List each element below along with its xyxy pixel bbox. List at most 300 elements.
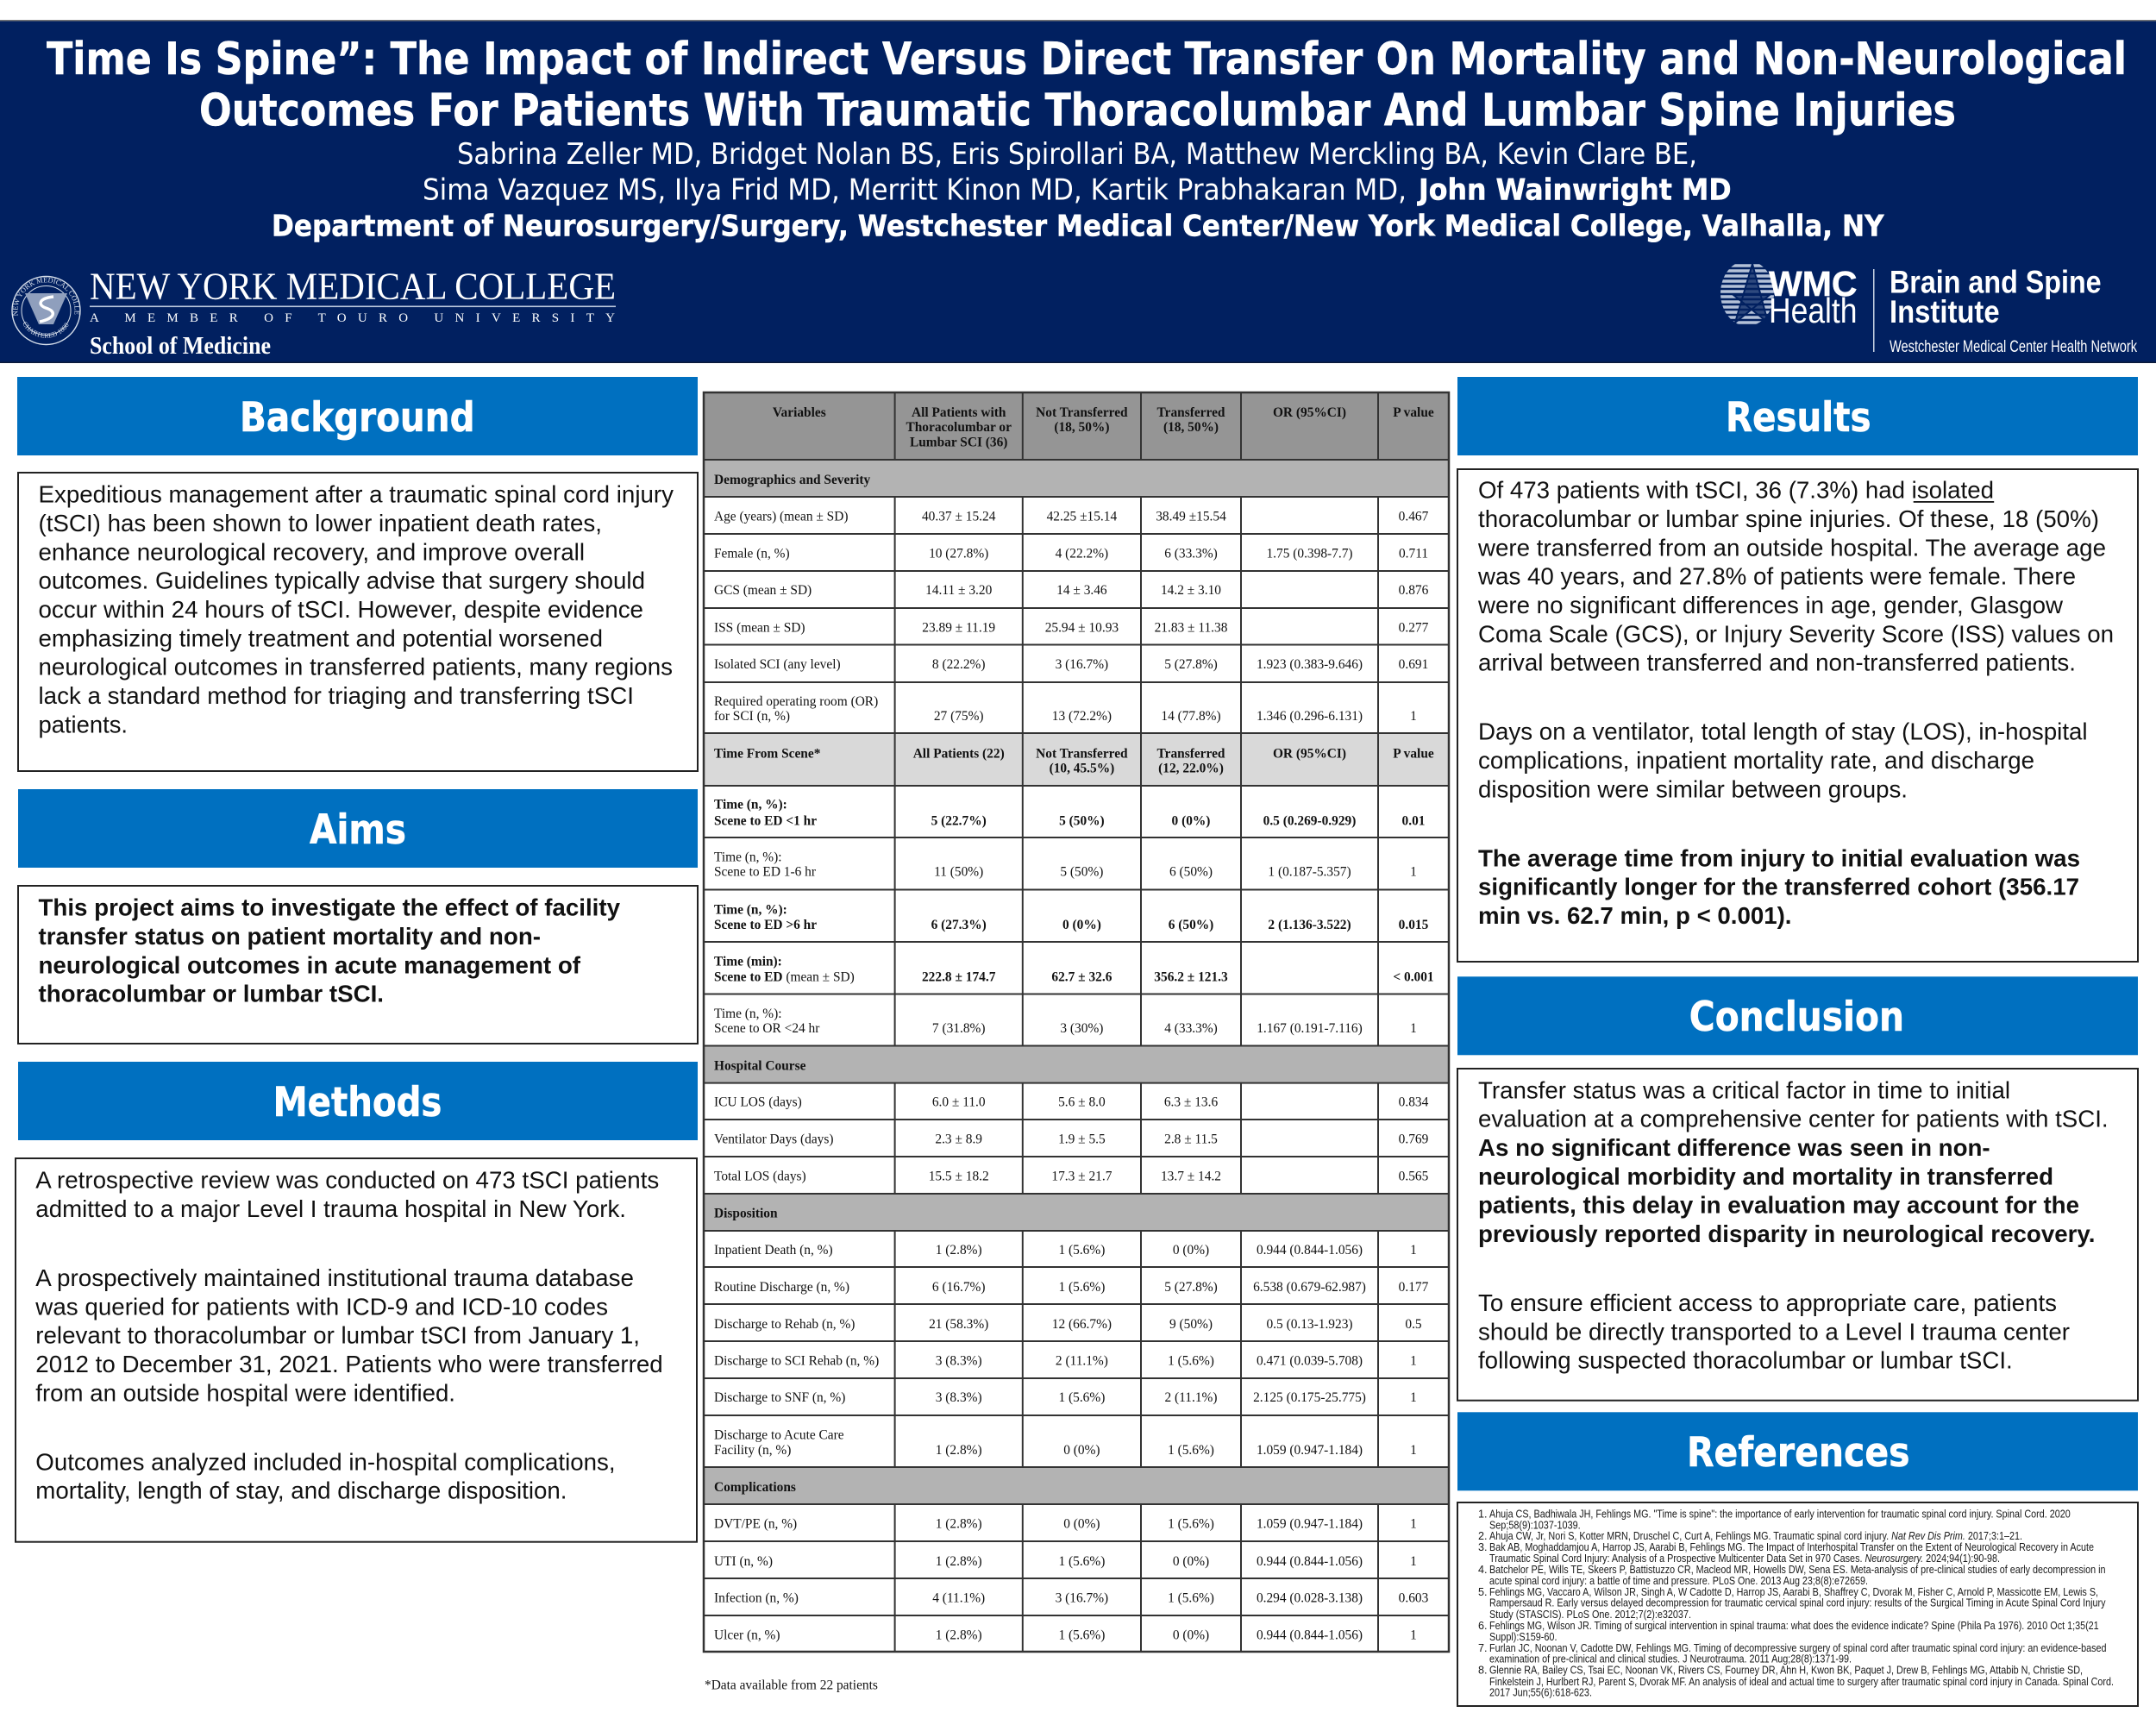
row: total LOS: 15.5 ± 18.2 [929,1169,989,1183]
text block: references [1457,1502,2138,1706]
row: required operating room: 14 (77.8%) [1161,709,1221,724]
text block: references: 2. [1478,1530,1488,1542]
text block: references: acute spinal cord injury: a battle of time and pressure. PLoS One. 2013 Aug 23;8(8):e72659. [1489,1575,1868,1587]
row: age: 40.37 ± 15.24 [922,510,996,524]
row: ICU LOS: 6.0 ± 11.0 [932,1095,986,1110]
row: scene to OR: 3 (30%) [1060,1021,1103,1036]
heading: results: Results [1726,394,1871,442]
text block: results: Of 473 patients with tSCI, 36 (7.3%) had isolated [1478,477,1994,504]
table header row: Not Transferred [1036,405,1128,420]
text block: conclusion: patients, this delay in evaluation may account for the [1478,1192,2079,1219]
row: GCS: 14.2 ± 3.10 [1161,583,1221,598]
table fills [704,392,1449,1504]
text block: references: 8. [1478,1665,1488,1677]
row: ulcer: 0 (0%) [1173,1628,1209,1642]
row: scene to OR [714,1007,1417,1036]
row: scene to ED under 1 hr: Scene to ED <1 hr [714,813,817,828]
row: ulcer: Ulcer (n, %) [714,1628,780,1642]
text block: methods: Outcomes analyzed included in-hospital complications, [35,1448,616,1475]
section: hospital course: Hospital Course [714,1058,806,1073]
row: discharge to acute care: Discharge to Acute Care [714,1427,844,1442]
heading: references [1457,1412,2138,1490]
row: scene to OR: Scene to OR <24 hr [714,1021,819,1036]
text block: background: occur within 24 hours of tSCI. However, despite evidence [38,596,643,623]
text block: conclusion: As no significant difference was seen in non- [1478,1134,1990,1161]
panel: aims [18,789,698,1044]
row: ICU LOS: 0.834 [1399,1095,1429,1110]
row: total LOS: 13.7 ± 14.2 [1161,1169,1221,1183]
row: scene to ED over 6 hr: 0 (0%) [1062,918,1101,932]
row: UTI: 1 [1410,1554,1417,1569]
row: ISS [714,621,1429,635]
text block: conclusion: evaluation at a comprehensive center for patients with tSCI. [1478,1106,2109,1132]
text block: methods: relevant to thoracolumbar or lumbar tSCI from January 1, [35,1322,640,1349]
table header row: OR (95%CI) [1273,405,1346,420]
text block: background: (tSCI) has been shown to lower inpatient death rates, [38,510,602,536]
text block: background: Expeditious management after a traumatic spinal cord injury [38,481,674,508]
row: required operating room: 13 (72.2%) [1052,709,1112,724]
text block: aims: This project aims to investigate the effect of facility [38,894,621,921]
text block: results: were no significant differences in age, gender, Glasgow [1477,592,2063,618]
row: GCS [714,583,1429,598]
logo: New York Medical College: NEW YORK MEDICAL COLLEGE [90,266,616,308]
section: time from scene: (12, 22.0%) [1158,762,1224,776]
text block: references: 6. [1478,1620,1488,1632]
row: scene to ED minutes: < 0.001 [1393,969,1434,985]
text block: references: Suppl):S159-60. [1489,1631,1557,1643]
logo: WMC Health Brain and Spine Institute [1716,264,2137,356]
row: isolated SCI: 8 (22.2%) [932,657,985,672]
text block: methods: A prospectively maintained institutional trauma database [35,1264,634,1291]
row: discharge to SCI rehab: 1 (5.6%) [1168,1354,1214,1369]
row: age: 42.25 ±15.14 [1047,510,1117,524]
row: ISS: 23.89 ± 11.19 [922,621,995,635]
row: scene to ED under 1 hr: 5 (22.7%) [931,813,987,828]
row: inpatient death: 0 (0%) [1173,1243,1209,1258]
row: ulcer: 1 [1410,1628,1417,1642]
row: discharge to rehab: Discharge to Rehab (n, %) [714,1317,855,1332]
icon: college seal: CHARTERED 1860 [22,322,69,338]
row: ICU LOS: 5.6 ± 8.0 [1058,1095,1106,1110]
row: scene to ED 1-6 hr: 6 (50%) [1169,865,1213,880]
row: ulcer: 0.944 (0.844-1.056) [1257,1628,1363,1642]
row: routine discharge: 0.177 [1399,1280,1429,1295]
row: scene to ED under 1 hr: 0.01 [1402,813,1425,828]
row: scene to ED 1-6 hr: 5 (50%) [1060,865,1103,880]
row: scene to ED over 6 hr: Time (n, %): [714,902,787,917]
row: age: 38.49 ±15.54 [1156,510,1226,524]
row: ventilator days [714,1132,1429,1147]
row: DVT/PE: 1 (2.8%) [936,1516,982,1531]
row: age: Age (years) (mean ± SD) [714,510,848,524]
panel: methods [16,1062,698,1542]
text block: references: 4. [1478,1564,1488,1576]
row: required operating room [714,694,1417,724]
row: isolated SCI: 5 (27.8%) [1164,657,1218,672]
row: discharge to acute care: 0 (0%) [1063,1443,1100,1458]
row: GCS: 14.11 ± 3.20 [925,583,993,598]
heading: conclusion: Conclusion [1689,994,1904,1041]
row: infection: 0.294 (0.028-3.138) [1257,1591,1363,1606]
row: UTI [714,1554,1417,1569]
row: female: 6 (33.3%) [1164,547,1218,561]
row: scene to OR: 1 [1410,1021,1417,1036]
section: time from scene: All Patients (22) [913,746,1005,761]
section: disposition: Disposition [714,1207,778,1221]
logo: WMC Health Brain and Spine Institute: Brain and Spine [1890,264,2102,299]
row: required operating room: 1.346 (0.296-6.131) [1257,709,1363,724]
row: UTI: UTI (n, %) [714,1554,773,1569]
row: UTI: 0 (0%) [1173,1554,1209,1569]
row: scene to ED over 6 hr: 6 (27.3%) [931,918,987,932]
text block: results: significantly longer for the transferred cohort (356.17 [1478,874,2079,900]
row: discharge to rehab: 12 (66.7%) [1052,1317,1112,1332]
row: ventilator days: Ventilator Days (days) [714,1132,833,1147]
text block: references: 2017 Jun;55(6):618-623. [1489,1687,1592,1699]
section: time from scene: Not Transferred [1036,746,1128,761]
row: UTI: 0.944 (0.844-1.056) [1257,1554,1363,1569]
row: scene to ED minutes: 356.2 ± 121.3 [1154,969,1228,985]
text block: methods: admitted to a major Level I trauma hospital in New York. [35,1195,626,1222]
row: infection: Infection (n, %) [714,1591,799,1606]
panel: results [1457,377,2138,962]
section: demographics and severity: Demographics and Severity [714,473,871,487]
row: DVT/PE: 1.059 (0.947-1.184) [1257,1516,1363,1531]
row: discharge to acute care [714,1427,1417,1458]
text block: results: Days on a ventilator, total length of stay (LOS), in-hospital [1478,718,2088,745]
row: required operating room: 27 (75%) [934,709,984,724]
text block: references: 7. [1478,1642,1488,1654]
authors [423,137,1732,208]
text block: references: Sep;58(9):1037-1039. [1489,1519,1581,1531]
row: infection: 4 (11.1%) [932,1591,985,1606]
heading: methods [18,1062,698,1140]
text block: conclusion: To ensure efficient access to appropriate care, patients [1478,1289,2057,1316]
text block: references: examination of pre-clinical and clinical studies. J Neurotrauma. 2011 Aug;28(8):1371-99. [1489,1653,1852,1665]
text block: results [1457,469,2138,962]
row: scene to ED over 6 hr: Scene to ED >6 hr [714,918,817,932]
logo: New York Medical College: A MEMBER OF TOURO UNIVERSITY [90,311,615,325]
text block: results: min vs. 62.7 min, p < 0.001). [1478,902,1792,929]
text block: conclusion: neurological morbidity and mortality in transferred [1478,1163,2053,1189]
text block: references: 5. [1478,1586,1488,1598]
row: discharge to SCI rehab: 3 (8.3%) [936,1354,982,1369]
text block: methods [16,1158,697,1542]
row: routine discharge: Routine Discharge (n, %) [714,1280,849,1295]
section: complications: Complications [714,1480,796,1495]
table footnote: *Data available from 22 patients [705,1678,878,1693]
header banner [0,20,2156,363]
title [47,34,2127,137]
row: ISS: 0.277 [1399,621,1429,635]
row: discharge to SCI rehab: Discharge to SCI Rehab (n, %) [714,1354,879,1369]
row: discharge to SNF: 1 (5.6%) [1058,1390,1105,1405]
row: total LOS: 17.3 ± 21.7 [1051,1169,1112,1183]
logo: New York Medical College: School of Medicine [90,332,271,360]
text block: references: 1. [1478,1508,1488,1520]
row: scene to ED under 1 hr: 0 (0%) [1172,813,1210,828]
row: discharge to rehab: 21 (58.3%) [929,1317,988,1332]
row: discharge to acute care: Facility (n, %) [714,1443,791,1458]
text block: background: neurological outcomes in transferred patients, many regions [38,654,673,681]
row: ulcer [714,1628,1417,1642]
section: time from scene [714,746,1434,776]
row: discharge to SNF: 2 (11.1%) [1165,1390,1217,1405]
text block: references: Study (STASCIS). PLoS One. 2012;7(2):e32037. [1489,1609,1691,1621]
text block: aims [18,886,698,1044]
text block: background: patients. [38,711,128,737]
text block: methods: from an outside hospital were identified. [35,1379,455,1406]
row: discharge to SNF [714,1390,1417,1405]
row: ulcer: 1 (5.6%) [1058,1628,1105,1642]
text block: results: were transferred from an outside hospital. The average age [1477,534,2106,561]
row: discharge to SCI rehab: 0.471 (0.039-5.708) [1257,1354,1363,1369]
table header row: (18, 50%) [1054,420,1109,435]
row: discharge to SNF: 2.125 (0.175-25.775) [1253,1390,1366,1405]
row: ICU LOS: ICU LOS (days) [714,1095,802,1110]
row: scene to ED over 6 hr: 2 (1.136-3.522) [1268,918,1351,932]
row: isolated SCI: 3 (16.7%) [1056,657,1108,672]
text block: methods: was queried for patients with ICD-9 and ICD-10 codes [34,1293,608,1320]
row: discharge to acute care: 1 (5.6%) [1168,1443,1214,1458]
table header row: Lumbar SCI (36) [910,436,1007,450]
text block: conclusion: following suspected thoracolumbar or lumbar tSCI. [1478,1347,2013,1374]
row: isolated SCI: 0.691 [1399,657,1428,672]
section: time from scene: Time From Scene* [714,746,821,761]
heading: references: References [1687,1429,1909,1477]
text block: results: The average time from injury to initial evaluation was [1478,844,2080,871]
row: female [714,547,1428,561]
row: total LOS: Total LOS (days) [714,1169,806,1183]
row: routine discharge: 6.538 (0.679-62.987) [1253,1280,1366,1295]
row: discharge to SNF: 3 (8.3%) [936,1390,982,1405]
row: infection: 0.603 [1399,1591,1429,1606]
row: inpatient death: 1 (5.6%) [1058,1243,1105,1258]
row: ICU LOS: 6.3 ± 13.6 [1164,1095,1218,1110]
row: discharge to SNF: 1 [1410,1390,1417,1405]
row: discharge to SCI rehab: 1 [1410,1354,1417,1369]
row: scene to OR: 7 (31.8%) [932,1021,985,1036]
text block: references: Ahuja CS, Badhiwala JH, Fehlings MG. "Time is spine": the importance of early intervention for traumatic spinal cord injury. Spinal Cord. 2020 [1489,1508,2071,1520]
row: DVT/PE: 1 [1410,1516,1417,1531]
row: female: 1.75 (0.398-7.7) [1266,547,1353,561]
row: scene to OR: 4 (33.3%) [1164,1021,1218,1036]
text block: results: disposition were similar between groups. [1478,775,1908,802]
row: discharge to rehab [714,1317,1422,1332]
row: scene to ED over 6 hr: 6 (50%) [1169,918,1213,932]
section: time from scene: (10, 45.5%) [1050,762,1114,776]
logo: WMC Health Brain and Spine Institute: Institute [1890,294,2000,329]
row: scene to ED 1-6 hr: Scene to ED 1-6 hr [714,865,816,880]
row: age: 0.467 [1399,510,1429,524]
row: female: 10 (27.8%) [929,547,988,561]
row: inpatient death: Inpatient Death (n, %) [714,1243,833,1258]
icon: WMC sphere [1720,264,1774,324]
row: ventilator days: 1.9 ± 5.5 [1058,1132,1106,1147]
panel: background [17,377,698,771]
logo: WMC Health Brain and Spine Institute: WMC [1769,264,1858,304]
text block: conclusion [1457,1069,2138,1401]
row: scene to ED 1-6 hr: 11 (50%) [934,865,983,880]
authors: Sima Vazquez MS, Ilya Frid MD, Merritt Kinon MD, Kartik Prabhakaran MD, [423,173,1407,208]
row: scene to ED minutes: Time (min): [714,955,782,969]
row: routine discharge [714,1280,1429,1295]
table header row: (18, 50%) [1163,420,1219,435]
row: isolated SCI [714,657,1428,672]
row: female: 4 (22.2%) [1056,547,1108,561]
row: scene to ED minutes: 222.8 ± 174.7 [922,969,996,985]
text block: conclusion: previously reported disparity in neurological recovery. [1478,1220,2096,1247]
text block: background: emphasizing timely treatment and potential worsened [38,624,603,651]
row: isolated SCI: 1.923 (0.383-9.646) [1257,657,1363,672]
row: GCS: 0.876 [1399,583,1429,598]
text block: aims: neurological outcomes in acute management of [38,951,581,978]
row: infection: 3 (16.7%) [1056,1591,1108,1606]
text block: conclusion: Transfer status was a critical factor in time to initial [1478,1076,2010,1103]
row: total LOS [714,1169,1429,1183]
row: discharge to acute care: 1 (2.8%) [936,1443,982,1458]
text block: results: complications, inpatient mortality rate, and discharge [1478,747,2034,774]
table header row: All Patients with [912,405,1006,420]
row: routine discharge: 5 (27.8%) [1164,1280,1218,1295]
logo: WMC Health Brain and Spine Institute: Health [1769,291,1858,330]
row: scene to ED over 6 hr: 0.015 [1399,918,1429,932]
row: inpatient death: 1 (2.8%) [936,1243,982,1258]
section: time from scene: Transferred [1157,746,1225,761]
row: required operating room: Required operating room (OR) [714,694,878,709]
panel: references [1457,1412,2138,1706]
table header row: Transferred [1157,405,1225,420]
row: DVT/PE [714,1516,1417,1531]
row: scene to ED minutes [714,955,1434,985]
row: routine discharge: 6 (16.7%) [932,1280,985,1295]
text block: methods: 2012 to December 31, 2021. Patients who were transferred [35,1351,663,1377]
text block: background: lack a standard method for triaging and transferring tSCI [38,682,634,709]
row: UTI: 1 (2.8%) [936,1554,982,1569]
row: discharge to SCI rehab: 2 (11.1%) [1056,1354,1108,1369]
text block: results: was 40 years, and 27.8% of patients were female. There [1477,563,2076,590]
icon: college seal [11,276,81,345]
section: time from scene: OR (95%CI) [1273,746,1346,761]
row: scene to ED 1-6 hr: 1 (0.187-5.357) [1268,865,1351,880]
table header row: Thoracolumbar or [906,420,1012,435]
text block: methods: mortality, length of stay, and discharge disposition. [35,1477,567,1504]
row: scene to OR: Time (n, %): [714,1007,782,1021]
heading: background [17,377,698,455]
row: GCS: 14 ± 3.46 [1056,583,1107,598]
row: DVT/PE: DVT/PE (n, %) [714,1516,797,1531]
row: scene to ED 1-6 hr: 1 [1410,865,1417,880]
row: scene to OR: 1.167 (0.191-7.116) [1257,1021,1363,1036]
row: DVT/PE: 1 (5.6%) [1168,1516,1214,1531]
row: scene to ED minutes: 62.7 ± 32.6 [1051,969,1112,985]
text block: results: Coma Scale (GCS), or Injury Severity Score (ISS) values on [1478,620,2114,647]
row: ISS: ISS (mean ± SD) [714,621,805,635]
row: discharge to rehab: 0.5 [1405,1317,1422,1332]
row: discharge to acute care: 1 [1410,1443,1417,1458]
text block: references: 3. [1478,1541,1488,1553]
heading: aims: Aims [310,806,406,854]
row: discharge to SNF: Discharge to SNF (n, %) [714,1390,845,1405]
row: required operating room: 1 [1410,709,1417,724]
text block: references: Ahuja CW, Jr, Nori S, Kotter MRN, Druschel C, Curt A, Fehlings MG. Traumatic spinal cord injury. Nat Rev Dis Prim. 2017;3:1–21. [1489,1530,2022,1542]
row: scene to ED under 1 hr: 5 (50%) [1059,813,1105,828]
row: scene to ED 1-6 hr: Time (n, %): [714,850,782,865]
row: scene to ED 1-6 hr [714,850,1417,880]
row: scene to ED under 1 hr [714,797,1425,828]
row: discharge to acute care: 1.059 (0.947-1.184) [1257,1443,1363,1458]
row: routine discharge: 1 (5.6%) [1058,1280,1105,1295]
row: ulcer: 1 (2.8%) [936,1628,982,1642]
text block: references: Traumatic Spinal Cord Injury: Analysis of a Prospective Multicenter Data Set in 970 Cases. Neurosurgery. 2024;94(1):90-98. [1489,1552,2000,1565]
text block: results: thoracolumbar or lumbar spine injuries. Of these, 18 (50%) [1478,505,2099,532]
text block: results: arrival between transferred and non-transferred patients. [1478,649,2076,676]
table header row: P value [1393,405,1434,420]
heading: methods: Methods [273,1079,442,1126]
row: discharge to rehab: 9 (50%) [1169,1317,1213,1332]
text block: background: outcomes. Guidelines typically advise that surgery should [38,568,645,594]
authors: Sabrina Zeller MD, Bridget Nolan BS, Eris Spirollari BA, Matthew Merckling BA, Kevin Clare BE, [457,137,1697,172]
row: scene to ED over 6 hr [714,902,1429,932]
heading: aims [18,789,698,868]
heading: results [1457,377,2138,455]
row: GCS: GCS (mean ± SD) [714,583,812,598]
row: ventilator days: 2.3 ± 8.9 [935,1132,982,1147]
row: ventilator days: 2.8 ± 11.5 [1164,1132,1218,1147]
authors: John Wainwright MD [1417,173,1732,208]
row: scene to ED under 1 hr: Time (n, %): [714,797,787,812]
text block: background: enhance neurological recovery, and improve overall [38,538,585,565]
logo: New York Medical College [11,266,616,360]
row: scene to ED under 1 hr: 0.5 (0.269-0.929) [1263,813,1356,828]
row: ICU LOS [714,1095,1429,1110]
row: discharge to SCI rehab [714,1354,1417,1369]
row: required operating room: for SCI (n, %) [714,709,790,724]
text block: background [18,473,698,771]
row: age [714,510,1429,524]
row: ISS: 25.94 ± 10.93 [1045,621,1119,635]
text block: methods: A retrospective review was conducted on 473 tSCI patients [35,1167,659,1194]
row: scene to ED minutes: Scene to ED (mean ± SD) [714,969,855,985]
row: isolated SCI: Isolated SCI (any level) [714,657,841,672]
row: total LOS: 0.565 [1399,1169,1429,1183]
text block: conclusion: should be directly transported to a Level I trauma center [1478,1318,2070,1345]
row: infection: 1 (5.6%) [1168,1591,1214,1606]
row: inpatient death: 1 [1410,1243,1417,1258]
table grid [704,392,1449,1652]
row: inpatient death: 0.944 (0.844-1.056) [1257,1243,1363,1258]
table header row [773,405,1434,450]
row: ISS: 21.83 ± 11.38 [1155,621,1228,635]
heading: conclusion [1457,976,2138,1055]
section: time from scene: P value [1393,746,1434,761]
row: ventilator days: 0.769 [1399,1132,1429,1147]
heading: background: Background [240,394,475,442]
text block: aims: thoracolumbar or lumbar tSCI. [38,981,384,1007]
results table [704,392,1449,1693]
table header row: Variables [773,405,826,420]
row: female: 0.711 [1399,547,1428,561]
row: UTI: 1 (5.6%) [1058,1554,1105,1569]
row: infection [714,1591,1429,1606]
row: DVT/PE: 0 (0%) [1063,1516,1100,1531]
panel: conclusion [1457,976,2138,1401]
row: female: Female (n, %) [714,547,790,561]
affiliation: Department of Neurosurgery/Surgery, Westchester Medical Center/New York Medical College, Valhalla, NY [272,209,1884,243]
row: inpatient death [714,1243,1417,1258]
row: discharge to rehab: 0.5 (0.13-1.923) [1266,1317,1353,1332]
text block: aims: transfer status on patient mortality and non- [38,923,541,950]
